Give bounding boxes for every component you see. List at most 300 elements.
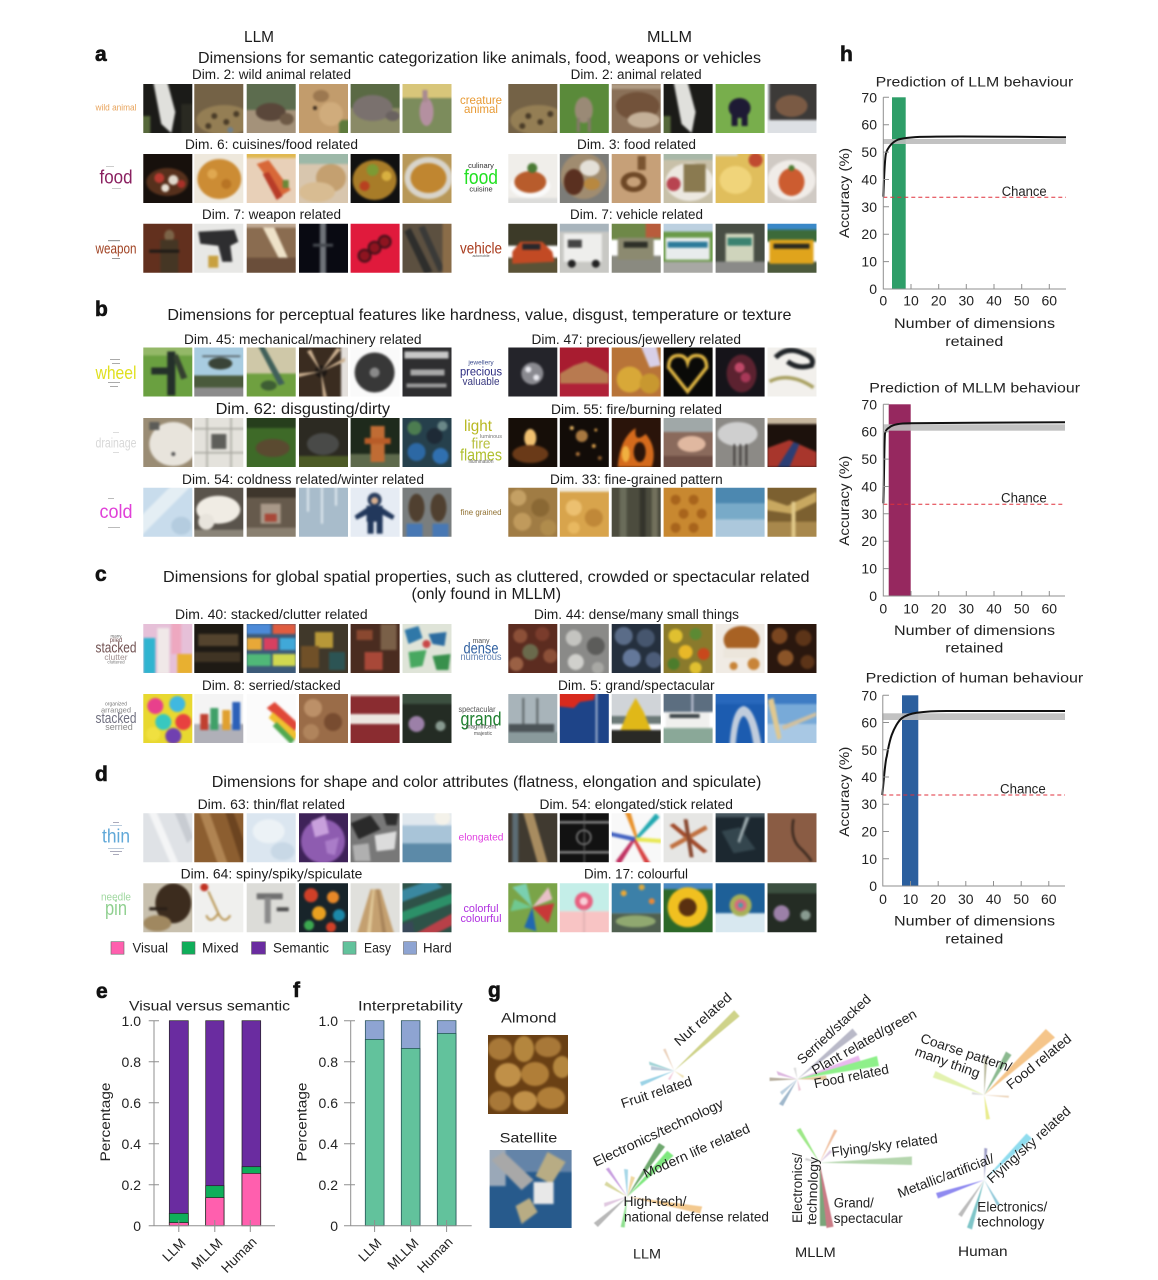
axes: [883, 695, 1065, 886]
x tick labels: 10: [903, 293, 919, 309]
x tick labels: 10: [903, 891, 918, 907]
x tick labels: 40: [986, 293, 1002, 309]
photo: badger: [143, 84, 192, 133]
photo: socket tool set: [398, 344, 456, 400]
photo: fried noodles box: [194, 154, 244, 203]
chance label: Chance: [1002, 184, 1047, 199]
y axis title: Accuracy (%): [836, 747, 852, 837]
y tick labels: 50: [861, 144, 877, 160]
panel b: perceptual features: [95, 298, 821, 541]
y tick labels: 60: [861, 424, 877, 440]
panel letter h: h: [840, 43, 853, 66]
caption: Dim. 63: Dim. 63: thin/flat related: [198, 797, 345, 812]
word cloud: many dense numerous: many: [472, 638, 490, 645]
photo: pretzel on board: [612, 154, 661, 203]
photo: badger: [664, 84, 713, 133]
y tick labels: 70: [861, 396, 877, 412]
chart: prediction of LLM behaviour: [836, 74, 1074, 349]
retained dimensions bar: [892, 97, 906, 289]
photo: blue gradient sky: [712, 484, 769, 540]
x tick labels: 30: [958, 891, 974, 907]
y tick labels: 60: [861, 117, 877, 133]
legend item: Mixed: [182, 941, 239, 956]
y tick labels: 30: [861, 796, 877, 812]
photo: wooden wheel: [299, 348, 348, 396]
y axis title: Accuracy (%): [836, 456, 852, 546]
photo: crumpled foil: [347, 809, 404, 866]
chart title: Prediction of human behaviour: [866, 670, 1084, 686]
column heading: LLM: LLM: [244, 29, 274, 46]
y tick labels e: 0.2: [122, 1177, 141, 1193]
heading c second line: (only found in MLLM): [412, 586, 561, 603]
heading a: Dimensions for semantic categorization like animals, food, weapons or vehicles: [198, 50, 761, 67]
photo: pale paper: [243, 809, 300, 866]
photo: fan of felt pens: [608, 809, 665, 866]
word cloud: spectacular grand: spectacular: [458, 705, 496, 714]
photo: soldier: [143, 224, 192, 273]
photo: curry bowl: [402, 154, 452, 203]
photo: water pump: [143, 348, 192, 396]
word cloud: vehicle: vehicle: [460, 240, 502, 258]
word cloud: creature animal: animal: [464, 102, 498, 116]
label: Food related Human: Food related: [1003, 1031, 1074, 1092]
photo: blue bus: [664, 224, 713, 273]
legend item: Mixed: Mixed: [202, 941, 239, 956]
column label MLLM: MLLM: [795, 1244, 836, 1260]
caption: Dim. 54 elongated: Dim. 54: elongated/stick related: [540, 797, 733, 812]
x tick labels: [879, 293, 1057, 309]
y tick labels: 0: [869, 878, 877, 894]
caption: Dim. 45: Dim. 45: mechanical/machinery related: [184, 332, 422, 347]
caption: Dim. 7 vehicle: Dim. 7: vehicle related: [570, 207, 703, 222]
y tick labels: [861, 396, 877, 604]
x tick labels: 60: [1042, 600, 1057, 616]
word cloud: many dense numerous: dense: [464, 640, 498, 658]
label: Modern life related: Modern life related: [641, 1121, 752, 1181]
photo: bubbles dark: [764, 879, 820, 936]
bars f: [365, 1021, 456, 1226]
y tick labels e: 0.4: [122, 1136, 141, 1152]
photo: glowing ground: [660, 414, 717, 471]
x tick labels f: [355, 1234, 456, 1276]
spoke plot: LLM almond: [640, 1010, 740, 1086]
photo: snow boots: [398, 484, 456, 541]
y tick labels f: 0.4: [319, 1136, 338, 1152]
caption: Dim. 7 weapon: Dim. 7: weapon related: [202, 207, 341, 222]
photo: honeycomb: [660, 484, 717, 541]
photo: candle: [504, 414, 561, 471]
photo: sword on black: [299, 224, 348, 273]
photo: tacos: [350, 154, 400, 203]
photo: leopard: [508, 84, 558, 133]
photo: market stall: [295, 620, 352, 677]
x axis title line 2: retained: [945, 930, 1003, 946]
label: Fruit related: Fruit related: [619, 1074, 694, 1111]
photo: satellite over ocean: [486, 1146, 576, 1236]
label: High-tech/: High-tech/: [624, 1194, 687, 1209]
label Satellite: Satellite: [500, 1130, 558, 1146]
photo: ruby ring: [712, 344, 769, 400]
word cloud: needle pin: [101, 892, 131, 920]
word cloud: stacked serried: arranged: [101, 706, 131, 714]
noise ceiling band: [883, 424, 1065, 431]
photo: snow surface: [139, 484, 196, 541]
x tick labels: [879, 600, 1057, 616]
y axis title e: Percentage: [97, 1082, 113, 1162]
word cloud: creature animal: creature: [460, 93, 502, 107]
photo: black gear: [347, 344, 404, 400]
legend item: Visual: Visual: [132, 941, 168, 956]
word cloud: fine grained: fine grained: [460, 507, 502, 517]
photo: camper van: [560, 224, 609, 273]
caption: Dim. 6 cuisines: Dim. 6: cuisines/food related: [185, 137, 358, 152]
y tick labels: 50: [861, 742, 877, 758]
photo: bead necklaces: [764, 344, 820, 400]
photo: carrots wrap: [246, 154, 296, 203]
photo: farm machine: [246, 348, 296, 396]
label: Electronics/technology LLM: Electronics/technology: [591, 1096, 726, 1169]
panel d: shape and color attributes: [95, 763, 820, 936]
photo: rifles: [402, 224, 452, 273]
chance line: [883, 196, 1066, 198]
x tick labels: 0: [879, 600, 887, 616]
photo: woven brown texture: [190, 809, 248, 866]
photo: icicles: [295, 484, 352, 541]
label: national defense related: national defense related: [624, 1210, 769, 1225]
y tick labels: 40: [861, 478, 877, 494]
word cloud: wheel: [95, 359, 136, 387]
panel letter a: a: [95, 43, 107, 66]
y tick labels e: 0.8: [122, 1054, 141, 1070]
column heading: MLLM: MLLM: [647, 29, 692, 46]
photo: fish hook: [190, 879, 247, 936]
x tick labels: 50: [1014, 600, 1030, 616]
spoke plot: Human almond: [933, 1029, 1055, 1120]
legend item: Easy: [343, 941, 391, 956]
photo: white yacht: [660, 690, 717, 746]
noise ceiling band: [882, 713, 1065, 720]
label: spectacular: spectacular: [834, 1211, 903, 1226]
accuracy curve: [883, 136, 1066, 197]
x tick labels: 10: [903, 600, 919, 616]
photo: otter: [612, 84, 661, 133]
photo: black panther: [716, 84, 765, 133]
legend item: Easy: Easy: [364, 941, 391, 956]
photo: pinwheel: [504, 879, 561, 936]
caption: Dim. 64: Dim. 64: spiny/spiky/spiculate: [181, 867, 362, 882]
label: Plant related/green: Plant related/green: [809, 1006, 919, 1078]
x tick labels: 20: [931, 600, 947, 616]
word cloud: stacked clutter: piled: [110, 638, 122, 644]
caption: Dim. 54: Dim. 54: coldness related/winter related: [182, 472, 424, 487]
word cloud: spectacular grand: majestic: [474, 731, 493, 737]
photo: dark machine tool: [712, 809, 769, 866]
photo: stew bowl: [508, 154, 558, 203]
word cloud: colorful colourful: colorful: [464, 903, 498, 915]
y tick labels: 40: [861, 769, 877, 785]
legend: [111, 941, 452, 956]
photo: leopard: [194, 84, 244, 133]
panel letter b: b: [95, 298, 108, 321]
photo: bear: [299, 84, 348, 133]
caption: Dim. 62: Dim. 62: disgusting/dirty: [216, 401, 390, 418]
spoke plot: MLLM almond: [770, 1028, 879, 1106]
photo: colour paint boxes: [243, 620, 300, 677]
caption: Dim. 40: Dim. 40: stacked/clutter related: [175, 607, 368, 622]
noise ceiling band: [883, 139, 1066, 144]
label: many thing: many thing: [913, 1044, 982, 1081]
y tick labels e: [122, 1013, 141, 1234]
photo: diamond on black: [504, 344, 561, 400]
x tick labels: 40: [986, 600, 1002, 616]
panel e: visual versus semantic bar chart: [96, 980, 290, 1276]
retained dimensions bar: [889, 404, 911, 596]
photo: almonds: [484, 1031, 574, 1121]
word cloud: elongated: elongated: [458, 832, 504, 844]
photo: bubbles dark: [398, 690, 456, 747]
photo: tall ship: [504, 690, 561, 747]
photo: lollipop: [556, 879, 613, 935]
label: Metallic/artificial/: Metallic/artificial/: [895, 1151, 996, 1201]
word cloud: wheel: wheel: [95, 363, 136, 383]
word cloud: culinary food cuisine: [464, 161, 498, 194]
y tick labels: [861, 687, 877, 894]
photo: red embroidered cloth: [556, 344, 613, 400]
photo: floating balloons: [608, 879, 665, 935]
panel letter c: c: [95, 563, 107, 586]
legend item: Semantic: Semantic: [273, 941, 329, 956]
photo: samosas: [299, 154, 348, 203]
x tick labels: 20: [930, 891, 946, 907]
panel c: global spatial properties: [95, 563, 820, 748]
x tick labels: 40: [986, 891, 1001, 907]
spoke plot: LLM satellite: [594, 1143, 702, 1228]
photo: coyote: [560, 84, 609, 133]
photo: sunflower: [660, 879, 717, 936]
y tick labels f: 1.0: [319, 1013, 338, 1029]
photo: yellow pasta: [716, 154, 765, 203]
caption: Dim. 8: Dim. 8: serried/stacked: [202, 678, 341, 693]
y tick labels f: 0.6: [319, 1095, 338, 1111]
word cloud: light fire flames: light: [464, 418, 493, 435]
accuracy curve: [883, 422, 1065, 503]
photo: toothpicks: [347, 879, 404, 936]
x axis title line 2: retained: [945, 333, 1003, 349]
y tick labels: 70: [861, 687, 877, 703]
x tick labels: [879, 891, 1057, 907]
axes: [883, 404, 1065, 596]
photo: red SUV: [508, 224, 558, 273]
label: Serried/stacked: Serried/stacked: [794, 991, 874, 1067]
caption: Dim. 47: Dim. 47: precious/jewellery related: [532, 332, 741, 347]
word cloud: spectacular grand: magnificent: [466, 724, 497, 730]
legend item: Hard: Hard: [423, 941, 452, 956]
photo: dark shelves: [190, 620, 247, 677]
photo: spaghetti plate: [768, 154, 816, 203]
word cloud: needle pin: pin: [105, 898, 127, 920]
photo: brown wall with hook: [764, 809, 820, 866]
x tick labels: 60: [1041, 891, 1057, 907]
word cloud: spectacular grand: [458, 705, 502, 737]
retained dimensions bar: [902, 695, 918, 886]
x tick labels e: LLM: [159, 1235, 189, 1265]
photo: scattered sticks: [660, 809, 717, 866]
photo: small metal parts: [243, 879, 300, 936]
axes e: [149, 1021, 275, 1232]
bars e: [169, 1021, 261, 1226]
photo: paper clips: [398, 879, 456, 936]
word cloud: needle pin: needle: [101, 892, 131, 904]
chart title f: Interpretability: [358, 998, 463, 1014]
word cloud: stacked serried: stacked: [96, 711, 136, 727]
x tick labels: 30: [959, 600, 974, 616]
photo: red flag and blue: [556, 690, 613, 747]
x tick labels: 60: [1042, 293, 1057, 309]
photo: black pattern: [556, 809, 613, 866]
x tick labels e: [159, 1234, 260, 1276]
y tick labels: 10: [861, 851, 877, 867]
label: Food related MLLM: Food related: [813, 1062, 890, 1091]
photo: grey shells: [556, 620, 613, 677]
photo: dog in grass: [243, 414, 300, 471]
word cloud: light fire flames: luminous: [480, 434, 502, 440]
word cloud: cold: [100, 498, 132, 528]
photo: floor drain: [190, 414, 247, 471]
word cloud: many dense numerous: numerous: [460, 651, 502, 663]
photo: glass on table: [243, 484, 300, 541]
axes: [883, 97, 1066, 289]
x tick labels: 0: [879, 293, 887, 309]
y tick labels: 20: [861, 533, 877, 549]
y tick labels e: 0.6: [122, 1095, 141, 1111]
photo: fire hydrant: [347, 414, 404, 471]
column label Human: Human: [958, 1243, 1008, 1259]
chart title: Prediction of MLLM behaviour: [869, 380, 1080, 396]
photo: dried apricots bowl: [712, 620, 769, 677]
photo: helicopter: [194, 348, 244, 396]
accuracy curve: [882, 711, 1065, 795]
photo: water droplets: [398, 809, 456, 865]
word cloud: weapon: weapon: [95, 240, 136, 258]
photo: glass bottles: [190, 690, 247, 748]
caption: Dim. 5: Dim. 5: grand/spectacular: [558, 678, 715, 693]
word cloud: culinary food cuisine: cuisine: [469, 184, 493, 194]
y tick labels: 0: [869, 588, 877, 604]
word cloud: vehicle: automobile: [472, 254, 490, 258]
x tick labels f: Human: [414, 1234, 456, 1276]
word cloud: culinary food cuisine: food: [464, 167, 498, 189]
photo: wolf in snow: [768, 84, 816, 133]
panel letter e: e: [96, 980, 108, 1003]
photo: sparks: [556, 414, 613, 471]
photo: tree bark: [608, 484, 665, 541]
photo: hedgehog shadow: [139, 879, 196, 936]
caption: Dim. 2 animal: Dim. 2: animal related: [571, 67, 702, 82]
column label LLM: LLM: [633, 1245, 661, 1261]
x tick labels e: Human: [218, 1234, 260, 1276]
photo: coloured pencils: [243, 690, 300, 747]
label: Electronics/ MLLM: Electronics/: [790, 1153, 805, 1223]
chart title e: Visual versus semantic: [129, 998, 290, 1014]
y tick labels: 50: [861, 451, 877, 467]
label Almond: Almond: [501, 1010, 556, 1026]
photo: amethyst crystal: [295, 809, 352, 866]
word cloud: drainage: [96, 432, 137, 453]
photo: straw: [764, 484, 820, 541]
chance line: [882, 794, 1065, 796]
caption: Dim. 3 food: Dim. 3: food related: [577, 137, 696, 152]
word cloud: colorful colourful: [460, 903, 502, 925]
photo: stuffed dish: [143, 154, 192, 203]
caption: Dim. 55: Dim. 55: fire/burning related: [551, 402, 722, 417]
label: Electronics/ Human: Electronics/: [977, 1200, 1048, 1215]
caption: Dim. 2 wild animal: Dim. 2: wild animal related: [192, 67, 351, 82]
x axis title: Number of dimensions: [894, 913, 1055, 929]
caption: Dim. 17: Dim. 17: colourful: [584, 867, 688, 882]
chance label: Chance: [1001, 491, 1047, 506]
photo: cranes in sky: [764, 690, 820, 747]
photo: kangaroo: [402, 84, 452, 133]
word cloud: stacked clutter: [96, 634, 136, 664]
y tick labels f: 0.2: [319, 1177, 338, 1193]
photo: flames: [608, 414, 665, 471]
photo: yellow tugboat: [608, 690, 665, 746]
caption: Dim. 44: Dim. 44: dense/many small things: [534, 607, 739, 622]
word cloud: stacked serried: serried: [105, 722, 133, 732]
y tick labels: 70: [861, 89, 877, 105]
photo: incense smoke: [712, 414, 769, 471]
y tick labels: 10: [861, 561, 877, 577]
chance label: Chance: [1000, 781, 1046, 796]
photo: pasta: [556, 484, 613, 541]
photo: nuts and seeds: [504, 620, 561, 677]
y tick labels e: 0: [133, 1218, 141, 1234]
x axis title: Number of dimensions: [894, 315, 1055, 331]
word cloud: light fire flames: [460, 418, 502, 465]
y tick labels f: [319, 1013, 338, 1234]
y tick labels: 30: [861, 199, 877, 215]
word cloud: light fire flames: illumination: [468, 459, 494, 465]
panel g: dimension contribution spoke plots: [484, 979, 1074, 1261]
word cloud: stacked clutter: many: [110, 634, 122, 638]
x tick labels f: MLLM: [384, 1235, 422, 1273]
x tick labels f: LLM: [355, 1235, 385, 1265]
word cloud: many dense numerous: [460, 638, 502, 663]
panel a: semantic categorization: [95, 43, 820, 278]
photo: wheat grains: [504, 484, 561, 541]
photo: knuckle duster on red: [350, 224, 400, 273]
photo: woven rope: [295, 690, 352, 747]
panel h: prediction accuracy charts: [836, 43, 1084, 946]
photo: missile launch: [246, 224, 296, 273]
y tick labels: 0: [869, 281, 877, 297]
label: Flying/sky related Human: Flying/sky related: [984, 1103, 1074, 1186]
word cloud: drainage: drainage: [96, 435, 137, 451]
photo: colourful buttons: [139, 690, 196, 747]
word cloud: jewellery precious valuable: precious: [460, 367, 502, 379]
y tick labels: 20: [861, 226, 877, 242]
word cloud: colorful colourful: colourful: [460, 913, 502, 925]
y tick labels e: 1.0: [122, 1013, 141, 1029]
photo: vintage bus: [716, 224, 765, 273]
photo: cluttered shop: [347, 620, 404, 677]
word cloud: thin: thin: [102, 826, 130, 848]
y axis title f: Percentage: [294, 1082, 310, 1162]
heading b: Dimensions for perceptual features like hardness, value, disgust, temperature or texture: [167, 307, 791, 324]
photo: dark mole mound: [295, 414, 352, 471]
x tick labels: 50: [1014, 293, 1030, 309]
photo: crowd: [398, 414, 456, 471]
